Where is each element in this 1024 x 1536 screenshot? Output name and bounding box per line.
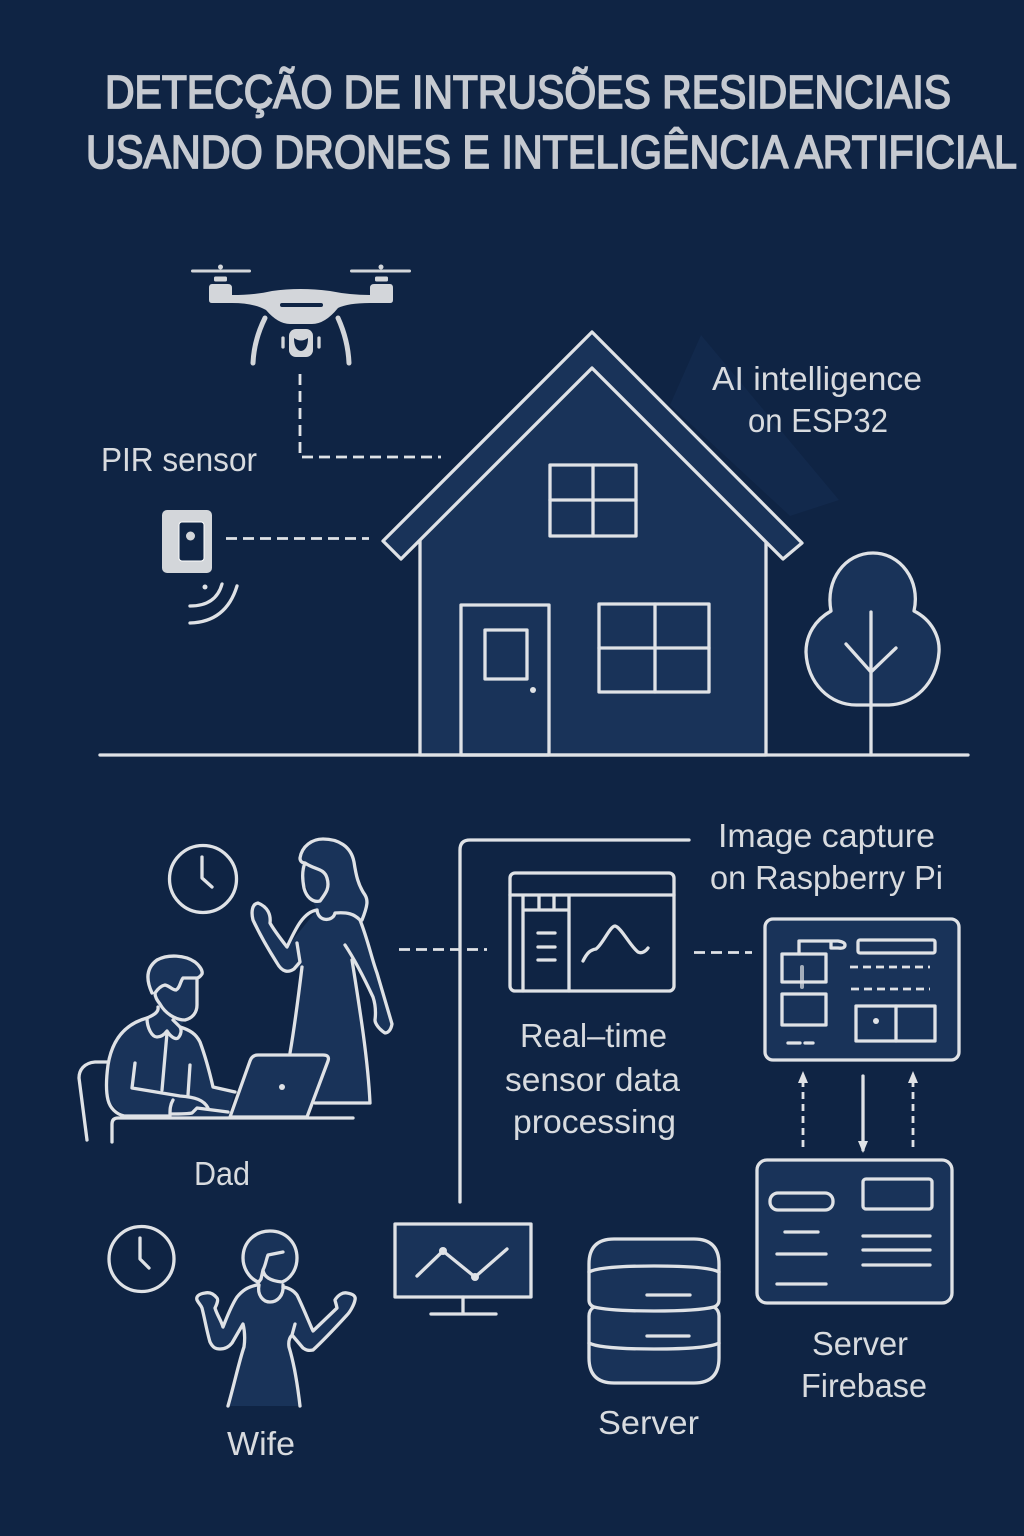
icon: PIR sensor	[162, 510, 237, 623]
connector: PIR sensor to house	[226, 537, 369, 540]
arrows: between Raspberry Pi and Firebase	[798, 1071, 918, 1153]
label: Dad: Dad	[194, 1155, 250, 1192]
icon: clock (wife)	[109, 1226, 174, 1292]
connector: dashboard to Raspberry Pi	[694, 951, 752, 954]
label: AI intelligence on ESP32	[712, 360, 922, 439]
faint panel behind AI label	[670, 335, 839, 516]
connector: drone to house	[300, 374, 441, 457]
label: Server Firebase: Firebase	[801, 1367, 927, 1404]
label: Wife: Wife	[227, 1425, 295, 1462]
label: Real-time sensor data processing: processing	[513, 1103, 676, 1140]
label: Server Firebase	[801, 1325, 927, 1404]
chair	[79, 1062, 107, 1140]
label: AI intelligence on ESP32: on ESP32	[748, 402, 888, 439]
ground line	[100, 753, 968, 757]
icon: house	[383, 332, 802, 755]
house body	[420, 368, 766, 755]
icon: drone	[191, 264, 411, 363]
attic window	[550, 465, 636, 536]
roof	[383, 332, 802, 559]
label: Image capture on Raspberry Pi: Image capture	[718, 817, 935, 854]
laptop	[230, 1055, 328, 1117]
front window	[599, 604, 709, 692]
connector: people to dashboard	[399, 948, 487, 951]
door	[461, 605, 549, 755]
label: Image capture on Raspberry Pi	[710, 817, 943, 896]
icon: tree	[806, 553, 939, 755]
illustration: wife	[197, 1231, 355, 1406]
icon: database server	[589, 1239, 719, 1383]
label: Real-time sensor data processing: sensor data	[505, 1061, 681, 1098]
label: Server: Server	[598, 1404, 699, 1441]
illustration: man at laptop	[79, 956, 353, 1142]
label: Real-time sensor data processing	[505, 1017, 681, 1140]
desk	[112, 1118, 353, 1142]
illustration: woman standing	[252, 839, 392, 1103]
panel: Firebase server	[757, 1160, 952, 1303]
label: AI intelligence on ESP32: AI intelligence	[712, 360, 922, 397]
label: PIR sensor: PIR sensor	[101, 441, 257, 478]
icon: chart monitor	[395, 1224, 531, 1314]
panel: Raspberry Pi board	[765, 919, 959, 1060]
icon: sensor dashboard	[510, 873, 674, 991]
label: Image capture on Raspberry Pi: on Raspberry Pi	[710, 859, 943, 896]
icon: clock (dad)	[170, 846, 236, 912]
label: Real-time sensor data processing: Real–time	[520, 1017, 667, 1054]
connector: monitor to image capture	[460, 840, 689, 1202]
title	[86, 66, 1017, 178]
label: Server Firebase: Server	[812, 1325, 908, 1362]
